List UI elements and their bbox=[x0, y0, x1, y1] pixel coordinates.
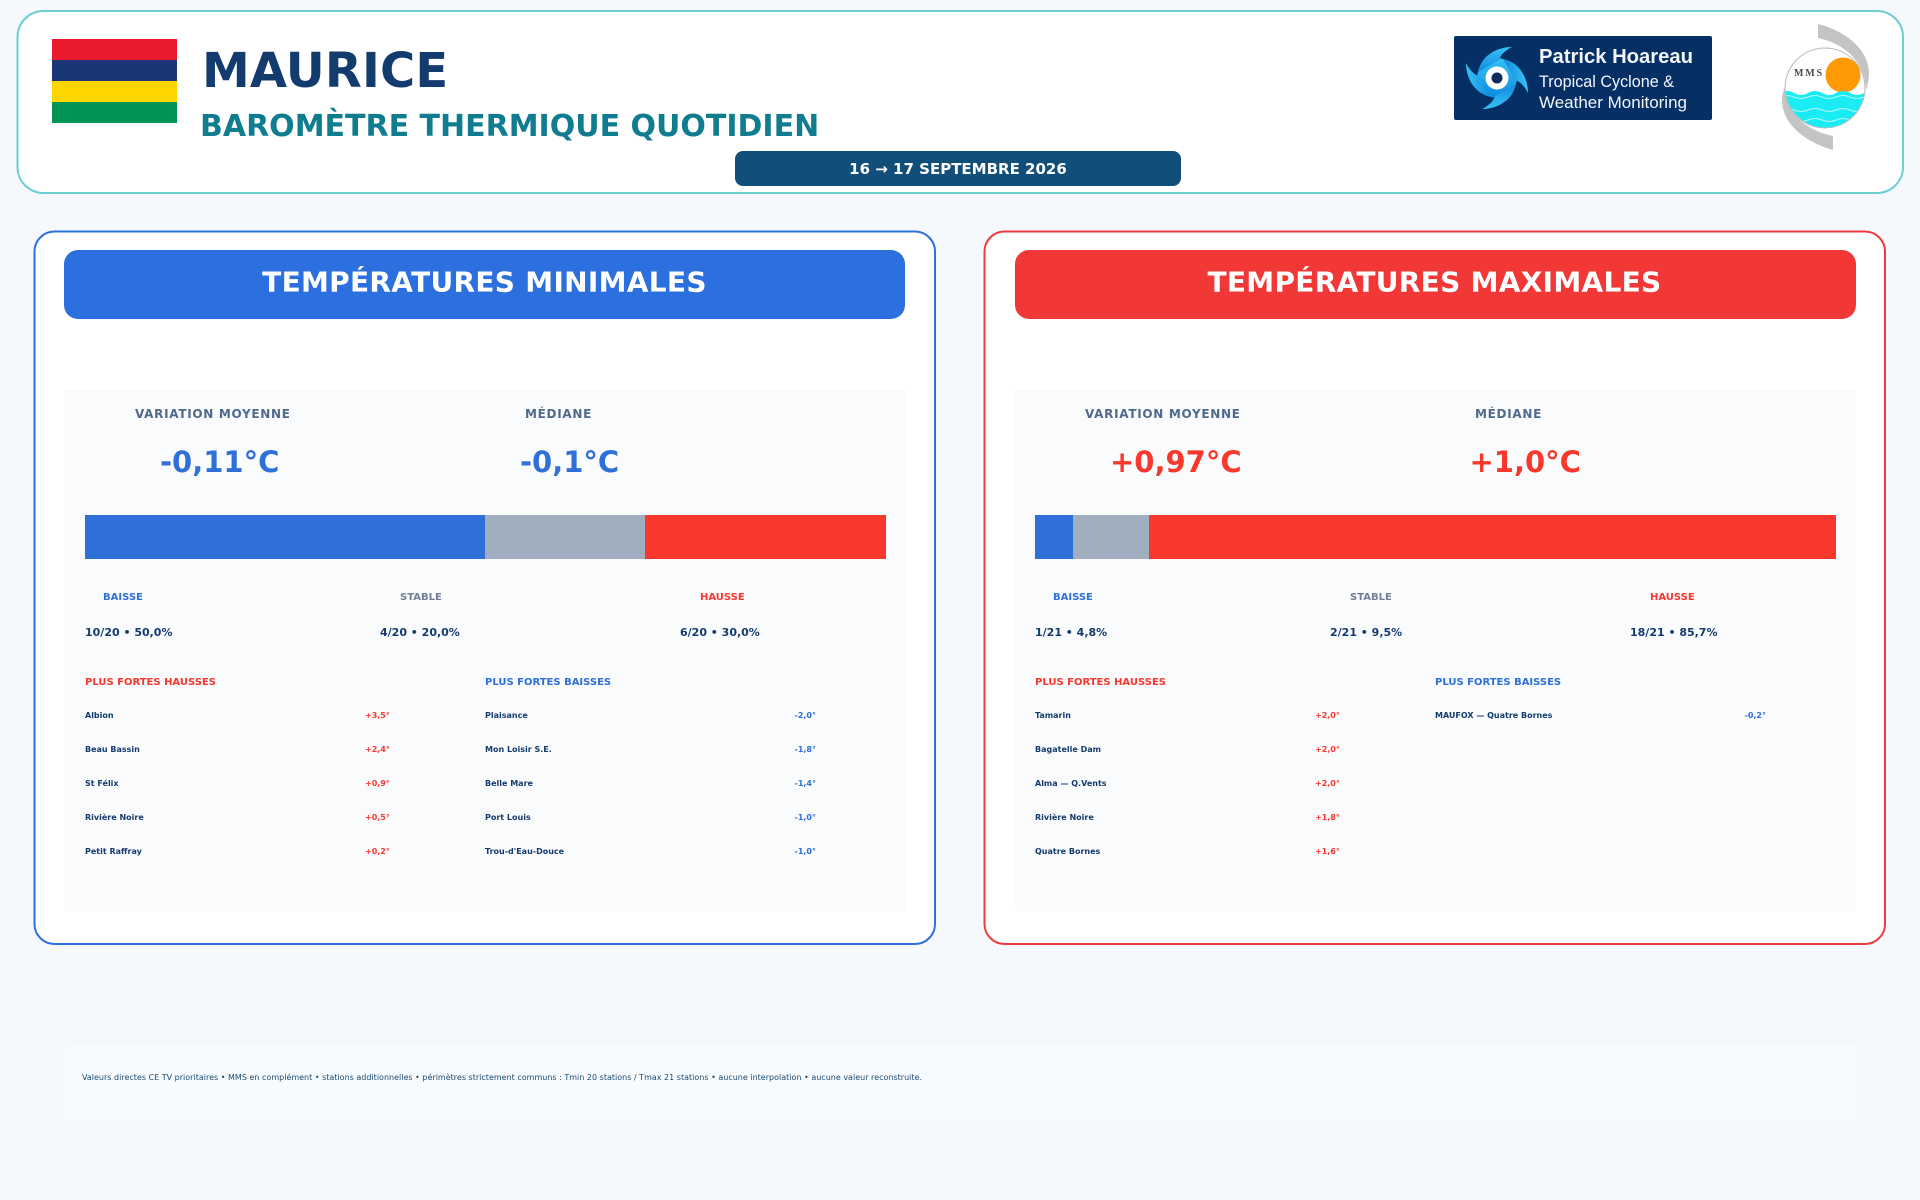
stat: variation moyenne bbox=[1085, 407, 1242, 479]
legend: baisse bbox=[1035, 592, 1107, 639]
footer note: Valeurs directes CE TV prioritaires • MMS en complément • stations additionnelles • périmètres strictement communs : Tmin 20 stations / Tmax 21 stations • aucune interpolation • aucune valeur reconstruite. bbox=[82, 1072, 922, 1082]
legend: stable: 2/21 • 9,5% bbox=[1330, 626, 1402, 639]
stat: médiane bbox=[520, 406, 619, 479]
stat: variation moyenne: +0,97°C bbox=[1110, 445, 1242, 479]
list: plus fortes hausses: +0,2° bbox=[365, 847, 390, 856]
list: plus fortes baisses bbox=[1435, 677, 1766, 720]
logo: Patrick Hoareau: Tropical Cyclone & bbox=[1539, 72, 1675, 91]
panel heading: TEMPÉRATURES MINIMALES bbox=[262, 264, 707, 298]
icon: Mauritius flag bbox=[52, 39, 177, 123]
list: plus fortes hausses: PLUS FORTES HAUSSES bbox=[1035, 677, 1166, 688]
panel heading bbox=[1015, 250, 1856, 319]
legend: hausse bbox=[680, 592, 760, 639]
date badge bbox=[735, 151, 1181, 186]
stat: médiane bbox=[1470, 406, 1581, 479]
legend: hausse: HAUSSE bbox=[700, 592, 745, 603]
inner stats panel bbox=[64, 390, 906, 911]
list: plus fortes hausses: +0,9° bbox=[365, 779, 390, 788]
list: plus fortes baisses: -1,4° bbox=[794, 779, 816, 788]
list: plus fortes baisses: Mon Loisir S.E. bbox=[485, 745, 552, 754]
list: plus fortes baisses: -0,2° bbox=[1744, 711, 1766, 720]
panel: températures maximales bbox=[984, 232, 1885, 944]
legend: stable bbox=[1330, 592, 1402, 639]
legend: hausse: 18/21 • 85,7% bbox=[1630, 626, 1717, 639]
stacked bar chart bbox=[1035, 515, 1836, 559]
list: plus fortes baisses: -2,0° bbox=[794, 711, 816, 720]
legend: hausse: HAUSSE bbox=[1650, 592, 1695, 603]
logo: Patrick Hoareau: Weather Monitoring bbox=[1539, 93, 1687, 112]
list: plus fortes hausses bbox=[85, 677, 390, 856]
logo: MMS: MMS bbox=[1794, 68, 1822, 79]
footer note bbox=[65, 1045, 1857, 1121]
legend: stable bbox=[380, 592, 460, 639]
list: plus fortes hausses: Beau Bassin bbox=[85, 745, 140, 754]
stacked bar chart bbox=[85, 515, 886, 559]
list: plus fortes hausses: PLUS FORTES HAUSSES bbox=[85, 677, 216, 688]
list: plus fortes hausses: +1,6° bbox=[1315, 847, 1340, 856]
header panel bbox=[18, 11, 1903, 193]
legend: baisse: BAISSE bbox=[103, 592, 143, 603]
legend: hausse bbox=[1630, 592, 1717, 639]
list: plus fortes baisses: -1,8° bbox=[794, 745, 816, 754]
list: plus fortes hausses: +1,8° bbox=[1315, 813, 1340, 822]
legend: hausse: 6/20 • 30,0% bbox=[680, 626, 760, 639]
list: plus fortes hausses: +2,0° bbox=[1315, 745, 1340, 754]
list: plus fortes hausses: +2,0° bbox=[1315, 779, 1340, 788]
list: plus fortes hausses: +2,0° bbox=[1315, 711, 1340, 720]
list: plus fortes hausses: +0,5° bbox=[365, 813, 390, 822]
list: plus fortes baisses: Trou-d'Eau-Douce bbox=[485, 847, 565, 856]
stat: variation moyenne bbox=[135, 407, 291, 479]
stat: médiane: +1,0°C bbox=[1470, 445, 1581, 479]
list: plus fortes baisses: PLUS FORTES BAISSES bbox=[485, 677, 611, 688]
list: plus fortes hausses: +3,5° bbox=[365, 711, 390, 720]
logo: MMS bbox=[1780, 24, 1869, 150]
list: plus fortes hausses: Rivière Noire bbox=[1035, 812, 1094, 822]
list: plus fortes baisses bbox=[485, 677, 816, 856]
panel heading bbox=[64, 250, 905, 319]
list: plus fortes hausses: St Félix bbox=[85, 778, 119, 788]
legend: stable: STABLE bbox=[1350, 592, 1392, 603]
legend: stable: STABLE bbox=[400, 592, 442, 603]
stat: médiane: -0,1°C bbox=[520, 445, 619, 479]
list: plus fortes baisses: Plaisance bbox=[485, 711, 528, 720]
list: plus fortes hausses: Quatre Bornes bbox=[1035, 847, 1101, 856]
list: plus fortes baisses: -1,0° bbox=[794, 847, 816, 856]
legend: baisse: 10/20 • 50,0% bbox=[85, 626, 172, 639]
list: plus fortes hausses: Alma — Q.Vents bbox=[1035, 779, 1107, 788]
list: plus fortes baisses: -1,0° bbox=[794, 813, 816, 822]
panel heading: TEMPÉRATURES MAXIMALES bbox=[1207, 264, 1662, 298]
stat: variation moyenne: VARIATION MOYENNE bbox=[1085, 407, 1241, 421]
list: plus fortes baisses: MAUFOX — Quatre Bornes bbox=[1435, 711, 1553, 720]
subtitle: BAROMÈTRE THERMIQUE QUOTIDIEN bbox=[200, 108, 819, 144]
list: plus fortes hausses: +2,4° bbox=[365, 745, 390, 754]
title: MAURICE bbox=[202, 43, 448, 99]
list: plus fortes baisses: Belle Mare bbox=[485, 779, 534, 788]
logo: Patrick Hoareau: Patrick Hoareau bbox=[1539, 46, 1693, 68]
list: plus fortes baisses: Port Louis bbox=[485, 813, 531, 822]
legend: stable: 4/20 • 20,0% bbox=[380, 626, 460, 639]
panel: températures minimales bbox=[34, 232, 935, 944]
list: plus fortes hausses bbox=[1035, 677, 1340, 856]
inner stats panel bbox=[1015, 390, 1856, 911]
list: plus fortes hausses: Petit Raffray bbox=[85, 847, 143, 856]
list: plus fortes hausses: Bagatelle Dam bbox=[1035, 745, 1101, 754]
stat: variation moyenne: VARIATION MOYENNE bbox=[135, 407, 291, 421]
legend: baisse: 1/21 • 4,8% bbox=[1035, 626, 1107, 639]
list: plus fortes hausses: Rivière Noire bbox=[85, 812, 144, 822]
logo: Patrick Hoareau bbox=[1454, 36, 1712, 120]
list: plus fortes hausses: Albion bbox=[85, 711, 114, 720]
list: plus fortes hausses: Tamarin bbox=[1035, 711, 1071, 720]
stat: variation moyenne: -0,11°C bbox=[160, 445, 279, 479]
legend: baisse bbox=[85, 592, 172, 639]
stat: médiane: MÉDIANE bbox=[525, 406, 592, 421]
date badge: 16 → 17 SEPTEMBRE 2026 bbox=[849, 160, 1067, 178]
stat: médiane: MÉDIANE bbox=[1475, 406, 1542, 421]
legend: baisse: BAISSE bbox=[1053, 592, 1093, 603]
list: plus fortes baisses: PLUS FORTES BAISSES bbox=[1435, 677, 1561, 688]
